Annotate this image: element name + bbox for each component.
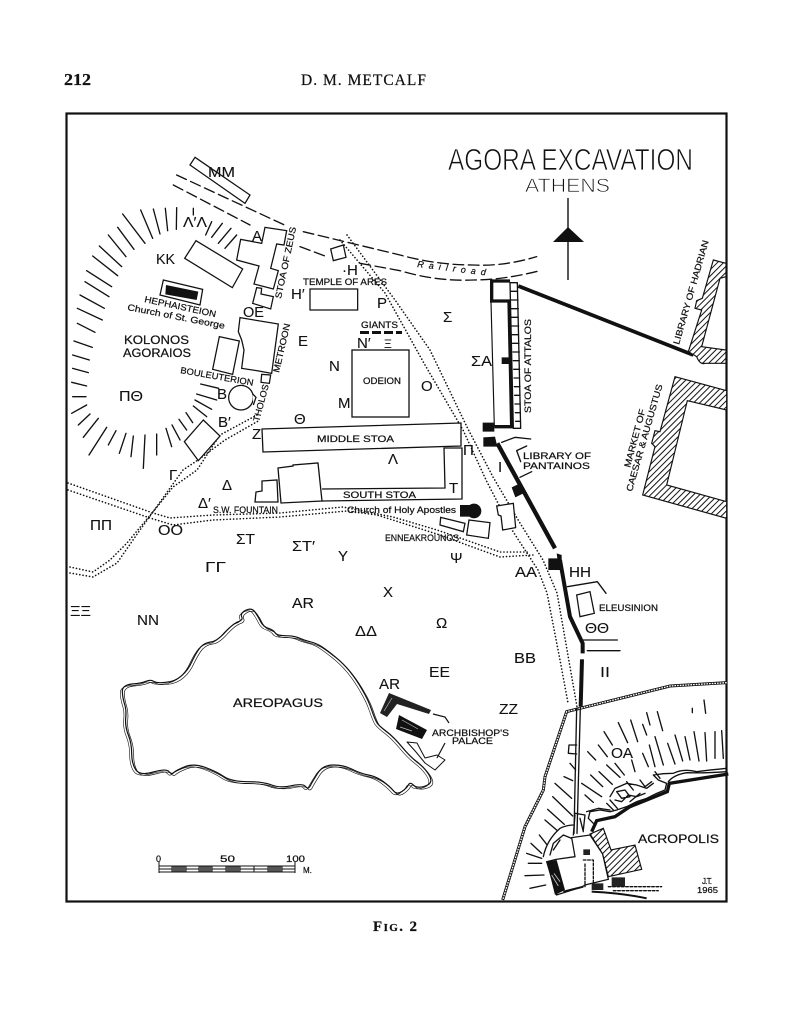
building: K: [278, 463, 322, 503]
monument name labels: [123, 226, 719, 895]
page number: 212: [64, 70, 91, 89]
running header: author: D. M. METCALF: [301, 72, 426, 89]
enclosure wall: [503, 683, 727, 900]
greek letter zone labels: Ν′: [357, 335, 371, 352]
building: small square: [261, 374, 271, 383]
Stoa of Attalos and post-Herulian wall: [440, 281, 693, 570]
monument name labels: ENNEAKROUNOS: [385, 533, 459, 543]
west bastion: [547, 860, 565, 895]
wall segment to Library of Hadrian: [518, 286, 693, 355]
monument name labels: BOULEUTERION: [180, 365, 254, 388]
greek letter zone labels: ΟΑ: [611, 745, 633, 762]
greek letter zone labels: ΘΘ: [585, 620, 609, 637]
greek letter zone labels: ΝΝ: [137, 612, 159, 629]
monument name labels: PANTAINOS: [523, 461, 590, 471]
monument name labels: Railroad: [417, 259, 487, 278]
Areopagus outline: [120, 609, 433, 795]
greek letter zone labels: Λ′Λ: [183, 214, 207, 231]
greek letter zone labels: Χ: [383, 584, 393, 601]
greek letter zone labels: Τ: [449, 480, 458, 497]
greek letter zone labels: ΜΜ: [208, 164, 235, 181]
building: MM: [190, 157, 250, 203]
greek letter zone labels: Ν: [329, 358, 340, 375]
map frame: [66, 114, 726, 902]
ladder colonnade: [510, 283, 521, 428]
approach road: [568, 708, 580, 833]
greek letter zone labels: Γ: [169, 467, 177, 484]
building: S.W. Fountain: [255, 480, 278, 502]
rectangular buildings: [440, 517, 465, 532]
monument name labels: ACROPOLIS: [638, 832, 719, 846]
railroad dashed tracks: [173, 175, 540, 280]
monument name labels: KOLONOS: [124, 333, 189, 347]
building: Middle Stoa: [262, 423, 461, 452]
building: Stoa of Zeus: [237, 227, 287, 289]
scale bar: [156, 854, 312, 875]
north cliff: [592, 774, 728, 832]
monument name labels: HEPHAISTEION: [144, 294, 217, 319]
Parthenon hatched: [590, 828, 642, 877]
building: South Stoa: [322, 448, 462, 501]
scale bar: 50: [220, 854, 235, 864]
greek letter zone labels: ΠΘ: [119, 388, 143, 405]
monument name labels: GIANTS: [361, 320, 398, 330]
building: small square H: [331, 245, 346, 261]
greek letter zone labels: ΖΖ: [499, 701, 518, 718]
palace block hatch streaks: [384, 698, 418, 731]
greek letter zone labels: Ξ: [384, 337, 392, 351]
greek letter zone labels: ΗΗ: [569, 564, 591, 581]
scale bar: M.: [303, 866, 312, 875]
greek letter zone labels: Β: [217, 386, 227, 403]
monument name labels: MIDDLE STOA: [317, 434, 394, 444]
greek letter zone labels: ΓΓ: [205, 559, 226, 576]
monument name labels: CAESAR & AUGUSTUS: [624, 383, 665, 493]
scale bar: 0: [156, 854, 161, 864]
greek letter zone labels: Π: [463, 442, 474, 459]
monument name labels: J.T.: [702, 877, 712, 886]
greek letter zone labels: ΣΤ: [236, 531, 255, 548]
greek letter zone labels: Ψ: [450, 550, 463, 567]
greek letter zone labels: Σ: [443, 309, 452, 326]
Acropolis rock and plateau: [543, 768, 728, 898]
greek letter zone labels: ΕΕ: [429, 664, 450, 681]
monument name labels: SOUTH STOA: [343, 490, 416, 500]
monument name labels: Church of Holy Apostles: [347, 505, 457, 515]
monument name labels: LIBRARY OF: [523, 451, 592, 461]
building: Hephaisteion: [160, 280, 203, 305]
dotted roads: [68, 235, 577, 707]
greek letter zone labels: Ε: [298, 333, 308, 350]
building: Odeion: [352, 350, 409, 417]
Church of Holy Apostles: [460, 504, 481, 518]
small dark squares: [583, 849, 625, 890]
greek letter zone labels: ΑR: [292, 595, 314, 612]
greek letter zone labels: ΑΑ: [515, 564, 537, 581]
greek letter zone labels: Α: [252, 228, 262, 245]
monument name labels: STOA OF ATTALOS: [523, 319, 533, 413]
greek letter zone labels: Υ: [338, 548, 348, 565]
map title: [448, 143, 693, 197]
wall segment to Eleusinion: [497, 443, 555, 548]
greek letter zone labels: ΟΟ: [158, 522, 183, 539]
monument name labels: THOLOS: [251, 383, 271, 423]
monument name labels: LIBRARY OF HADRIAN: [671, 239, 711, 346]
monument name labels: PALACE: [452, 736, 493, 746]
greek letter zone labels: Θ: [294, 411, 306, 428]
plateau: [547, 835, 608, 895]
monument name labels: 1965: [697, 885, 718, 895]
palace main block: [396, 715, 427, 739]
greek letter zone labels: Ο: [421, 378, 433, 395]
buildings: north-west group: [160, 157, 358, 461]
greek letter zone labels: Η′: [291, 286, 305, 303]
building: Temple of Ares: [310, 289, 358, 310]
greek letter zone labels: ΔΔ: [355, 623, 377, 640]
gate: [573, 813, 585, 835]
stoa thick walls: [492, 281, 512, 427]
greek letter zone labels: Ι: [498, 459, 502, 476]
Market of Caesar and Augustus hatched walls: [643, 377, 727, 518]
greek letter zone labels: ΚΚ: [156, 251, 175, 268]
greek letter zone labels: ·Η: [342, 262, 358, 279]
monument name labels: S.W. FOUNTAIN: [213, 505, 278, 515]
building: annex: [253, 288, 273, 309]
greek letter zone labels: Ζ: [252, 426, 261, 443]
map title: AGORA EXCAVATION: [448, 143, 693, 177]
Acropolis enclosure wall, road and Eleusinion: [503, 560, 727, 900]
Archbishop's Palace buildings: [380, 693, 449, 770]
greek letter zone labels: ΙΙ: [600, 664, 610, 681]
building: Bouleuterion: [213, 337, 239, 374]
building: KK: [185, 241, 243, 288]
greek letter zone labels: Δ′: [198, 495, 211, 512]
dashed lines: [583, 860, 662, 891]
figure caption: Fig. 2: [373, 919, 417, 935]
greek letter zone labels: Β′: [218, 414, 231, 431]
south wall and dashes: [563, 887, 647, 898]
Acropolis slope hatching: [525, 700, 723, 888]
Library of Pantainos leader lines: [502, 437, 532, 477]
Giants dashed wall: [360, 331, 402, 334]
icon: north arrow: [553, 198, 584, 280]
monument name labels: ODEION: [363, 376, 401, 386]
Eleusinion roads: [567, 582, 620, 651]
greek letter zone labels: ΑR: [379, 676, 400, 693]
map title: ATHENS: [525, 175, 610, 197]
wall continuation: [560, 560, 583, 707]
buildings: central group: [255, 350, 462, 503]
monument name labels: METROON: [271, 322, 292, 373]
stoa outline: [491, 302, 494, 427]
monument name labels: ARCHBISHOP'S: [432, 728, 509, 738]
monument name labels: ELEUSINION: [599, 603, 658, 613]
greek letter zone labels: Λ: [388, 451, 398, 468]
Library of Hadrian hatched walls: [688, 260, 726, 364]
greek letter zone labels: Μ: [338, 395, 350, 412]
greek letter zone labels: Ω: [436, 615, 447, 632]
small building: [497, 503, 516, 530]
greek letter zone labels: ΣΤ′: [292, 538, 315, 555]
Eleusinion: [577, 592, 594, 617]
greek letter zone labels: ΟΕ: [243, 304, 264, 321]
monument name labels: AGORAIOS: [123, 346, 191, 360]
greek letter zone labels: ΞΞ: [70, 603, 91, 620]
monument name labels: TEMPLE OF ARES: [303, 277, 387, 287]
greek letter zone labels: ΒΒ: [514, 650, 536, 667]
monument name labels: STOA OF ZEUS: [273, 226, 298, 299]
building: Tholos: [229, 385, 256, 410]
greek letter zone labels: Ρ: [377, 295, 387, 312]
wall towers: [483, 357, 562, 570]
monument name labels: Church of St. George: [127, 302, 226, 331]
greek letter zone labels: ΣΑ: [471, 353, 492, 370]
rock scribbles: [543, 768, 727, 857]
leader lines: [433, 714, 449, 758]
monument name labels: AREOPAGUS: [233, 696, 323, 710]
building: Metroon: [238, 318, 278, 373]
greek letter zone labels: Δ: [222, 477, 232, 494]
hill hatching: Kolonos Agoraios: [72, 208, 237, 468]
monument name labels: MARKET OF: [622, 407, 648, 469]
greek letter zone labels: [70, 164, 633, 762]
rocky outcrop and leader lines: [407, 742, 445, 770]
scale bar: 100: [286, 854, 305, 864]
building beside church: [467, 520, 490, 538]
building: Square B': [184, 420, 220, 461]
greek letter zone labels: ΠΠ: [90, 517, 112, 534]
